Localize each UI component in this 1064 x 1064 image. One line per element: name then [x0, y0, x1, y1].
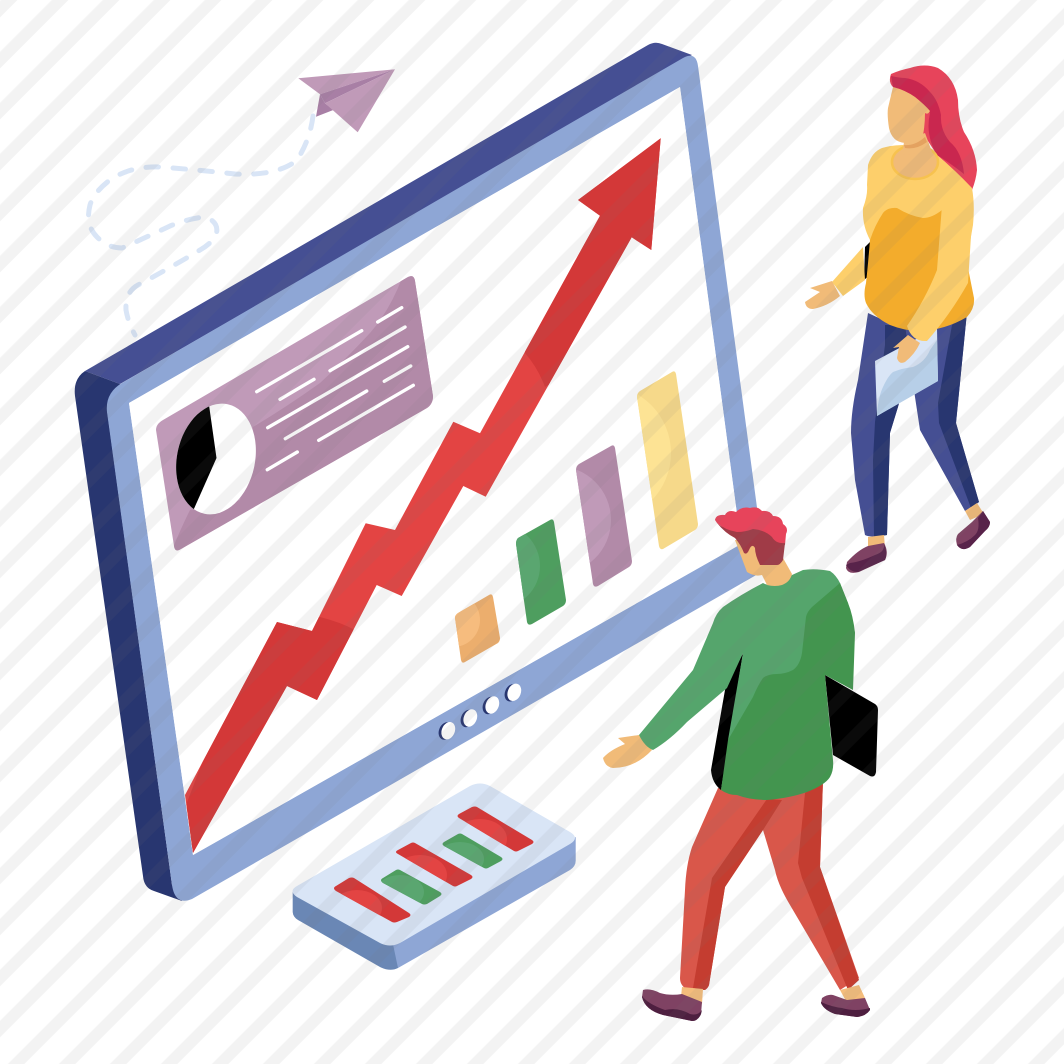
woman shoes: [846, 511, 990, 573]
panel: pie chart and text lines: [156, 270, 440, 555]
woman ankles: [868, 535, 885, 550]
woman hand on paper: [893, 335, 920, 363]
text lines: [257, 308, 413, 470]
man shirt shade: [721, 583, 855, 800]
monitor left edge: [75, 371, 182, 901]
woman shirt front shade: [864, 208, 974, 331]
man hand: [603, 735, 652, 768]
keypad device: [292, 784, 576, 970]
keypad keys: [332, 806, 534, 926]
bar: green: [516, 519, 566, 625]
monitor buttons: [436, 682, 524, 742]
woman face: [888, 87, 930, 143]
icon: paper plane: [298, 69, 395, 132]
bar chart: [455, 371, 698, 663]
man shoes: [642, 989, 870, 1021]
dashed flight path: [89, 116, 313, 335]
woman paper: [875, 328, 938, 416]
woman held black item: [864, 240, 872, 280]
man hair: [715, 507, 787, 565]
person: man in green: [603, 507, 878, 1021]
monitor frame and screen: [107, 56, 764, 901]
man shirt back black panel: [711, 653, 743, 790]
woman legs: [851, 312, 979, 537]
bar: purple: [576, 445, 632, 587]
pie chart: [176, 404, 256, 514]
arrow: rising red trend: [185, 138, 661, 853]
woman forearm: [832, 247, 865, 296]
man legs: [680, 780, 859, 990]
woman sleeve: [907, 205, 973, 341]
bar: yellow: [637, 371, 698, 550]
woman hand: [805, 281, 840, 309]
man ankles: [681, 987, 703, 1004]
bar: orange: [455, 594, 500, 663]
person: woman in yellow: [805, 66, 990, 573]
man neck and face: [735, 540, 792, 586]
man shirt: [639, 569, 855, 750]
woman neck and collar: [892, 133, 938, 179]
monitor: [75, 43, 764, 901]
woman shirt: [863, 145, 974, 300]
woman hair: [890, 66, 977, 190]
monitor top edge: [85, 43, 692, 384]
man folder: [825, 675, 878, 776]
